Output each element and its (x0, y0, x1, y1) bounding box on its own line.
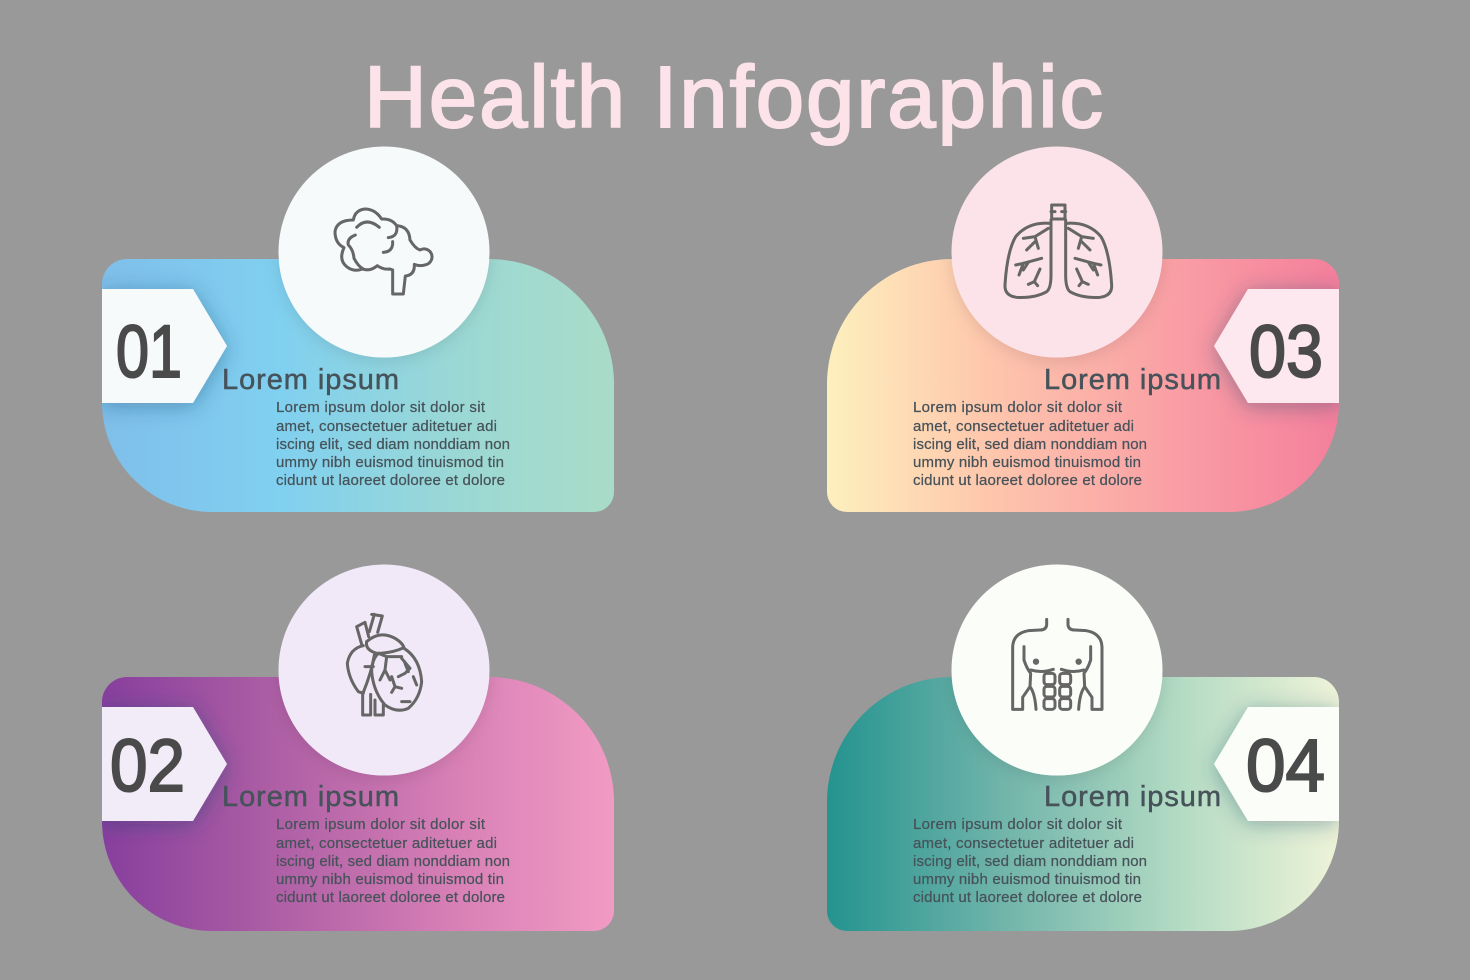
body text 01: amet, consectetuer aditetuer adi (276, 418, 497, 435)
body text 04 (913, 816, 1147, 906)
heading 01: Lorem ipsum (222, 364, 399, 396)
heading 04: Lorem ipsum (1044, 781, 1221, 813)
body text 04: ummy nibh euismod tinuismod tin (913, 871, 1141, 888)
panel: 04 torso (827, 564, 1339, 931)
body text 01: Lorem ipsum dolor sit dolor sit (276, 399, 486, 416)
icon circle: torso (952, 564, 1162, 776)
body text 04: cidunt ut laoreet doloree et dolore (913, 889, 1142, 906)
body text 03 (913, 399, 1147, 489)
icon circle: brain (278, 146, 490, 358)
panel: 02 heart (102, 564, 614, 931)
card background 04 (827, 677, 1339, 931)
body text 01 (276, 399, 510, 489)
number tag 04 (1214, 707, 1339, 821)
heading 02: Lorem ipsum (222, 781, 399, 813)
number tag 01 (102, 289, 227, 403)
number tag 03 (1214, 289, 1339, 403)
panel: 03 lungs (827, 146, 1339, 512)
icon circle: heart (278, 564, 490, 776)
body text 01: cidunt ut laoreet doloree et dolore (276, 472, 505, 489)
panel: 01 brain (102, 146, 614, 512)
card background 03 (827, 259, 1339, 512)
body text 03: iscing elit, sed diam nonddiam non (913, 436, 1147, 453)
body text 04: Lorem ipsum dolor sit dolor sit (913, 816, 1123, 833)
card background 01 (102, 259, 614, 512)
body text 03: ummy nibh euismod tinuismod tin (913, 454, 1141, 471)
heading 03: Lorem ipsum (1044, 364, 1221, 396)
number tag 02 (102, 707, 227, 821)
body text 04: iscing elit, sed diam nonddiam non (913, 853, 1147, 870)
card background 02 (102, 677, 614, 931)
number tag 04: 04 (1246, 724, 1325, 807)
number tag 03: 03 (1249, 310, 1323, 393)
body text 02: iscing elit, sed diam nonddiam non (276, 853, 510, 870)
number tag 01: 01 (116, 310, 182, 393)
body text 03: cidunt ut laoreet doloree et dolore (913, 472, 1142, 489)
body text 03: Lorem ipsum dolor sit dolor sit (913, 399, 1123, 416)
body text 03: amet, consectetuer aditetuer adi (913, 418, 1134, 435)
body text 04: amet, consectetuer aditetuer adi (913, 835, 1134, 852)
icon circle: lungs (952, 146, 1162, 358)
body text 02: cidunt ut laoreet doloree et dolore (276, 889, 505, 906)
body text 01: ummy nibh euismod tinuismod tin (276, 454, 504, 471)
title: Health Infographic (364, 49, 1103, 146)
body text 02: ummy nibh euismod tinuismod tin (276, 871, 504, 888)
body text 02 (276, 816, 510, 906)
body text 02: Lorem ipsum dolor sit dolor sit (276, 816, 486, 833)
body text 02: amet, consectetuer aditetuer adi (276, 835, 497, 852)
body text 01: iscing elit, sed diam nonddiam non (276, 436, 510, 453)
number tag 02: 02 (110, 724, 185, 807)
